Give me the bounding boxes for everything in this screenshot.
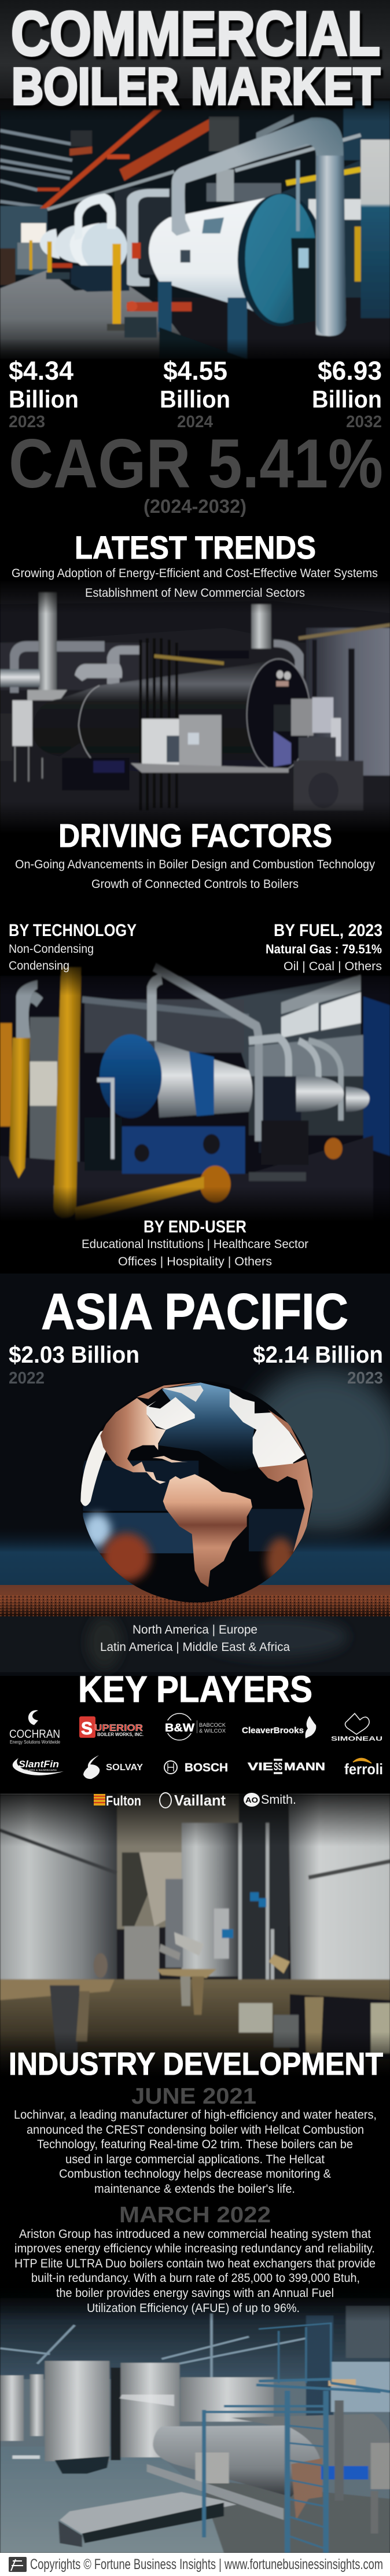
stat 2024: Billion	[160, 386, 230, 413]
panel: by end-user: Offices | Hospitality | Others	[118, 1255, 272, 1268]
silver chimney	[39, 592, 57, 691]
logo: Simoneau: SIMONEAU	[331, 1735, 382, 1742]
text block: June 2021 development: Technology, featuring Real-time O2 trim. These boilers can be	[37, 2138, 353, 2151]
stat 2024: $4.55	[163, 356, 227, 386]
stat 2023: Billion	[9, 386, 79, 413]
panel: by end-user: BY END-USER	[144, 1217, 246, 1236]
fade into black below photo	[0, 802, 390, 834]
logo: A.O. Smith: AO	[245, 1796, 258, 1804]
globe illustration	[79, 1379, 314, 1605]
text block: March 2022 development: built-in redundancy. With a burn rate of 285,000 to 399,000 Btuh,	[31, 2272, 360, 2285]
text block: June 2021 development: used in large commercial applications. The Hellcat	[65, 2153, 325, 2166]
text: other regions: Latin America | Middle East & Africa	[100, 1641, 290, 1654]
panel: footer	[0, 2553, 390, 2576]
silver Europe and Africa	[230, 1391, 305, 1467]
heading: asia pacific: ASIA PACIFIC	[41, 1283, 348, 1340]
wooden platforms	[0, 1979, 115, 2000]
logo: Slant/Fin	[13, 1758, 64, 1775]
text: trend one: Growing Adoption of Energy-Efficient and Cost-Effective Water Systems	[12, 567, 378, 580]
silver horizontal duct	[0, 669, 40, 687]
reflected light	[84, 1514, 111, 1547]
text: other regions	[100, 1623, 290, 1654]
stat 2024: 2024	[177, 413, 213, 431]
blue valves	[321, 2466, 368, 2479]
panel: by fuel	[266, 921, 382, 973]
text block: June 2021 development: announced the CREST condensing boiler with Hellcat Combustion	[27, 2123, 364, 2137]
panel: industry tank photo	[0, 1795, 390, 2309]
yellow horizontal pipe	[75, 1177, 204, 1221]
logo: Ferroli: ferroli	[344, 1760, 383, 1778]
stat 2024	[160, 356, 230, 431]
panel: by fuel: Natural Gas : 79.51%	[266, 942, 382, 956]
stat 2023: 2023	[9, 413, 45, 431]
CAGR period: (2024-2032)	[144, 496, 246, 517]
hall ceiling	[0, 2287, 390, 2379]
silver storage tank one	[45, 2361, 109, 2461]
text: driver two: Growth of Connected Controls to Boilers	[91, 878, 299, 891]
copper North America	[100, 1398, 166, 1484]
bottom fade behind heading	[0, 2032, 390, 2077]
blue boiler base	[122, 1126, 245, 1174]
logo: Superior Boiler Works: S	[81, 1718, 93, 1738]
fade of photo into header	[0, 98, 390, 122]
logo: Superior Boiler Works: BOILER WORKS, INC.	[97, 1732, 144, 1737]
white crescent highlight	[80, 1430, 106, 1506]
burner housing	[274, 698, 341, 761]
heading: key players: KEY PLAYERS	[78, 1668, 312, 1710]
copper South America	[163, 1474, 252, 1587]
far-left tank	[0, 2375, 24, 2441]
logo: Fulton	[94, 1793, 141, 1809]
fade into black above photo	[0, 579, 390, 614]
copper rim north	[137, 1382, 201, 1399]
stat: 2023	[253, 1341, 383, 1388]
main white boiler	[149, 196, 281, 325]
panel: by technology: Non-Condensing	[9, 942, 94, 956]
text block: June 2021 development: Combustion technology helps decrease monitoring &	[59, 2167, 331, 2181]
panel: by end-user: Educational Institutions | Healthcare Sector	[82, 1238, 308, 1251]
conveyor	[60, 2492, 236, 2535]
stat: 2022: 2022	[9, 1369, 45, 1388]
top fade into black	[0, 955, 390, 996]
floor	[0, 1979, 390, 2077]
lower ocean tone	[83, 1461, 198, 1511]
right tank	[289, 1795, 390, 1997]
heading: March 2022: MARCH 2022	[119, 2203, 271, 2228]
yellow safety post	[112, 244, 121, 324]
panel: by technology: BY TECHNOLOGY	[9, 921, 137, 940]
stat: 2023: 2023	[347, 1369, 383, 1388]
logo: Viessmann: VIE	[248, 1761, 273, 1773]
bright factory windows	[281, 974, 361, 1038]
text block: March 2022 development: improves energy efficiency while increasing redundancy and reliability.	[14, 2242, 375, 2255]
panel: by technology: Condensing	[9, 959, 69, 973]
background silver boilers	[296, 1075, 344, 1111]
logo: Vaillant: Vaillant	[174, 1792, 226, 1809]
stat: 2022	[9, 1341, 139, 1388]
main boiler body	[154, 1041, 252, 1118]
control cabinet	[142, 715, 222, 766]
stat 2032	[312, 356, 382, 431]
logo: Superior Boiler Works	[79, 1716, 144, 1738]
text block: March 2022 development: Utilization Efficiency (AFUE) of up to 96%.	[87, 2302, 300, 2315]
logo: Viessmann: SS	[274, 1761, 282, 1773]
rust particle ground	[0, 1585, 390, 1616]
middle tanks	[182, 1823, 239, 1976]
silver storage tank two	[121, 2363, 179, 2457]
stat 2032: $6.93	[318, 356, 382, 386]
logo: Superior Boiler Works: UPERIOR	[94, 1723, 144, 1733]
panel: key players backdrop	[0, 1676, 390, 1795]
logo: Babcock and Wilcox: BABCOCK	[199, 1722, 226, 1728]
heading: latest trends: LATEST TRENDS	[75, 529, 316, 566]
orange valve	[200, 1166, 231, 1202]
logo: Cleaver-Brooks: CleaverBrooks	[242, 1726, 304, 1735]
left tank	[0, 1795, 117, 1979]
bottom fade into black	[0, 1187, 390, 1221]
copper Africa	[259, 1459, 313, 1553]
rust glow right	[266, 1538, 295, 1584]
logo: Viessmann: MANN	[284, 1761, 325, 1773]
Greenland	[162, 1385, 204, 1402]
logo: Cleaver-Brooks	[242, 1716, 316, 1738]
floor	[0, 2447, 274, 2553]
logo: Cochran: Energy Solutions Worldwide	[10, 1740, 60, 1745]
logo: Slant/Fin: SlantFin	[19, 1759, 59, 1770]
caribbean islands	[152, 1456, 188, 1463]
vertical black tubes	[141, 639, 176, 810]
dusk background	[0, 1274, 390, 1676]
panel: regional globe scene	[0, 1274, 390, 1676]
blue access frame and ladder	[204, 2323, 390, 2553]
stat: 2022: $2.03 Billion	[9, 1341, 139, 1368]
grey overhead pipes	[154, 967, 259, 1141]
logo: Bosch	[164, 1761, 228, 1774]
boiler room illustration	[0, 101, 390, 359]
top fade into black	[0, 2287, 390, 2321]
panel: segmentation boiler photo	[0, 955, 390, 1275]
heading: June 2021: JUNE 2021	[131, 2084, 256, 2109]
text block: March 2022 development	[14, 2228, 376, 2315]
stat 2032: 2032	[346, 413, 382, 431]
text: trend two: Establishment of New Commercial Sectors	[85, 586, 305, 600]
header backdrop	[0, 0, 390, 116]
logo: A.O. Smith: Smith.	[261, 1792, 296, 1807]
black below fade	[0, 834, 390, 868]
logo: Cochran: COCHRAN	[9, 1728, 60, 1741]
north ocean	[158, 1382, 256, 1474]
corridor ceiling	[117, 1795, 289, 1929]
stat 2023	[9, 356, 79, 431]
logo: Bosch: BOSCH	[185, 1762, 228, 1774]
text block: March 2022 development: Ariston Group has introduced a new commercial heating system that	[19, 2228, 371, 2241]
panel: market size stats	[9, 356, 383, 517]
logo: Solvay	[83, 1755, 143, 1779]
logo: A.O. Smith	[244, 1792, 296, 1807]
fan box	[293, 761, 363, 810]
fade of photo into black	[0, 339, 390, 365]
logo: Solvay: SOLVAY	[106, 1763, 143, 1773]
secondary boilers	[40, 229, 60, 259]
text block: June 2021 development: Lochinvar, a leading manufacturer of high-efficiency and water heaters,	[14, 2108, 377, 2122]
right horizontal tank	[231, 2414, 390, 2470]
logo: Viessmann	[248, 1760, 325, 1773]
panel: hero header and boiler room photo	[0, 0, 390, 365]
logo: Fulton: Fulton	[106, 1793, 141, 1809]
stat 2023: $4.34	[9, 356, 73, 386]
logo: Slant/Fin: BOILERS & BASEBOARD	[23, 1768, 57, 1771]
background tanks	[181, 2377, 274, 2421]
text: driver one: On-Going Advancements in Boiler Design and Combustion Technology	[15, 858, 375, 871]
main horizontal silver tank	[153, 2425, 321, 2497]
large insulated pipe	[172, 118, 346, 336]
panel: by technology	[9, 921, 137, 973]
process piping	[240, 1823, 273, 2012]
stat 2032: Billion	[312, 386, 382, 413]
text: other regions: North America | Europe	[133, 1623, 257, 1636]
stat: 2023: $2.14 Billion	[253, 1341, 383, 1368]
panel: by end-user	[82, 1217, 308, 1268]
panel: tank hall photo	[0, 2287, 390, 2553]
text block: June 2021 development	[14, 2108, 377, 2196]
work table	[131, 763, 289, 773]
panel: latest trends photo	[0, 579, 390, 868]
text block: March 2022 development: HTP Elite ULTRA Duo boilers contain two heat exchangers that provide	[14, 2257, 376, 2270]
main yellow riser	[53, 967, 82, 1218]
logo: Cochran	[9, 1710, 60, 1745]
text block: March 2022 development: the boiler provides energy savings with an Annual Fuel	[56, 2287, 334, 2300]
top fade into key players band	[0, 1795, 390, 1847]
logo: Babcock and Wilcox: & WILCOX	[199, 1728, 226, 1734]
logo: Simoneau	[331, 1713, 382, 1742]
logo: Babcock and Wilcox: B&W	[165, 1722, 194, 1734]
text block: June 2021 development: maintenance & extends the boiler's life.	[94, 2182, 295, 2196]
heading: driving factors: DRIVING FACTORS	[58, 817, 332, 854]
logo: Babcock and Wilcox	[165, 1713, 226, 1740]
rust glow left	[102, 1533, 150, 1581]
black text backing	[0, 2077, 390, 2309]
silver North America	[146, 1397, 195, 1430]
black boiler body	[32, 659, 311, 773]
icon: Fortune Business Insights logo	[9, 2557, 27, 2572]
black below scene	[0, 1221, 390, 1275]
panel: by fuel: Oil | Coal | Others	[284, 960, 382, 973]
copper rim north-east	[268, 1410, 306, 1456]
orange pipes left	[0, 1023, 12, 1126]
